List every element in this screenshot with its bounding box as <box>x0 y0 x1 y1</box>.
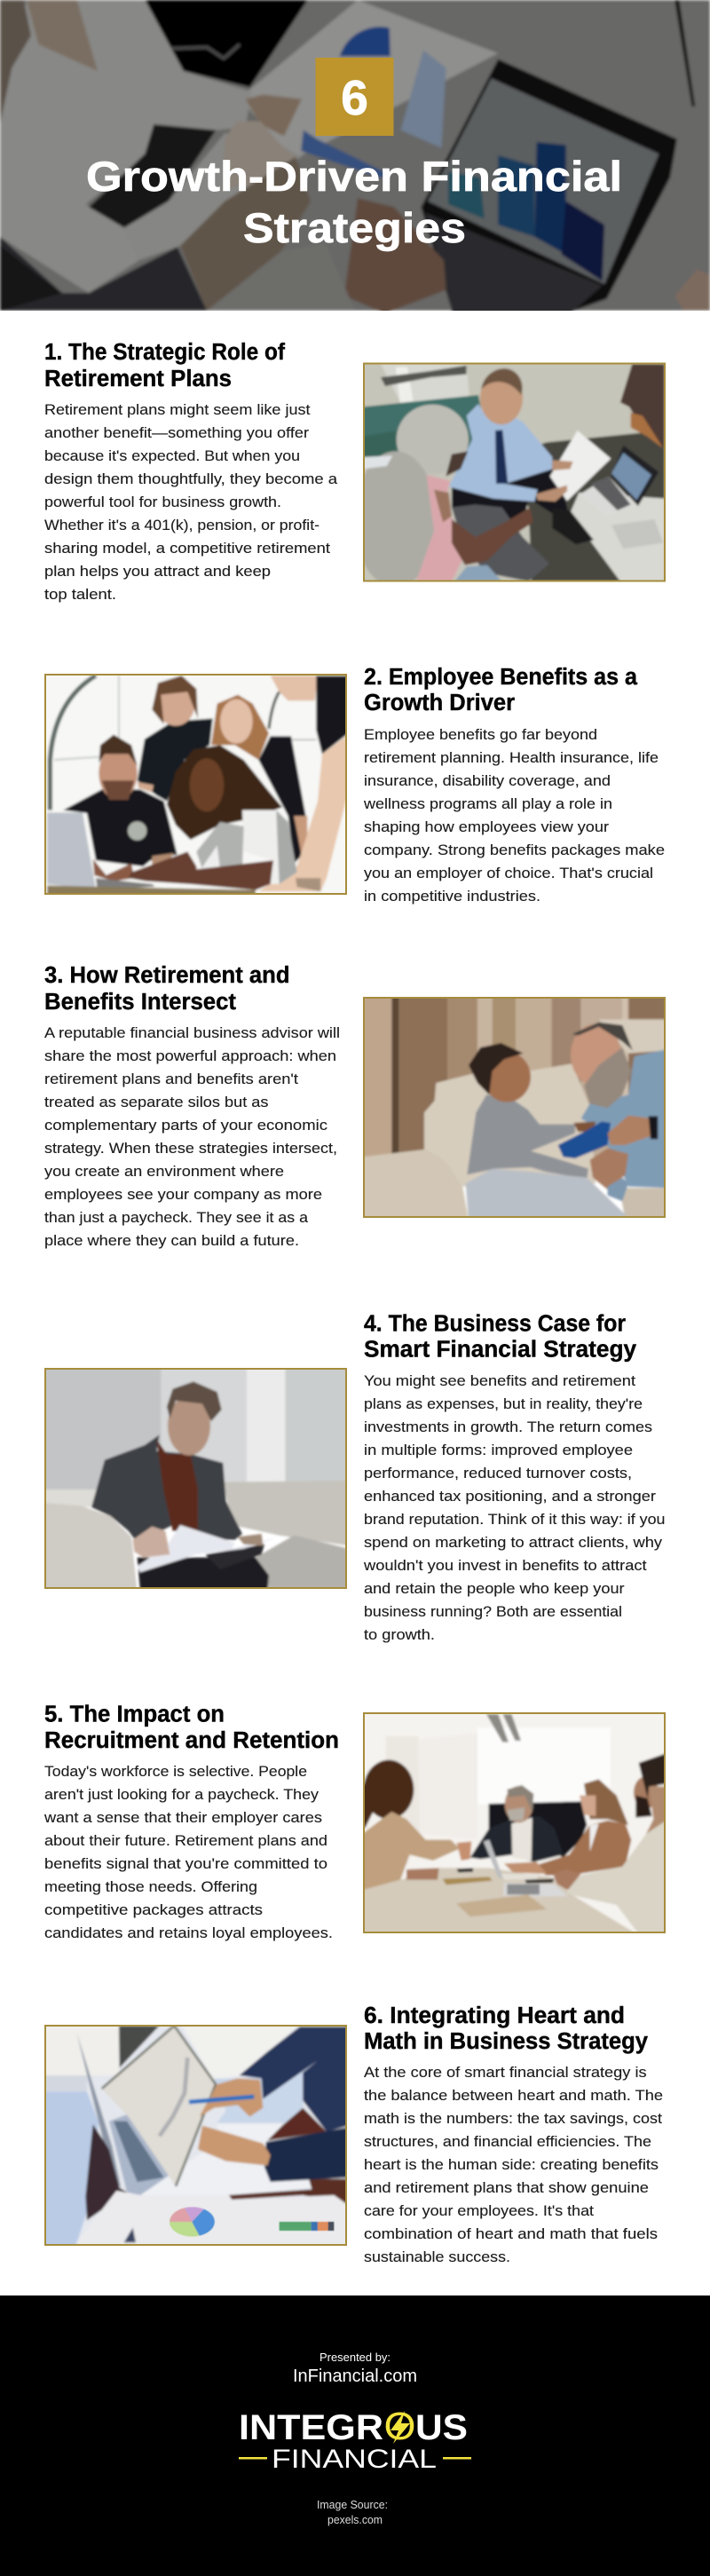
main title: Growth-Driven Financial <box>86 153 622 200</box>
body text 1: top talent. <box>44 587 116 603</box>
body text 5: competitive packages attracts <box>44 1902 263 1918</box>
body text 4: investments in growth. The return comes <box>364 1419 652 1435</box>
presented by: Presented by: <box>320 2351 390 2364</box>
heading 1: Retirement Plans <box>44 367 232 391</box>
body text 5: want a sense that their employer cares <box>43 1810 322 1826</box>
body text 3: employees see your company as more <box>44 1187 322 1203</box>
body text 3: you create an environment where <box>44 1164 284 1180</box>
body text 1: Whether it's a 401(k), pension, or profit- <box>44 518 320 533</box>
image source credit: pexels.com <box>327 2513 383 2526</box>
body text 2: in competitive industries. <box>364 889 540 905</box>
icon: lightning bolt <box>390 2411 410 2444</box>
body text 4: enhanced tax positioning, and a stronger <box>364 1489 657 1505</box>
presented by: InFinancial.com <box>293 2367 417 2386</box>
body text 5: benefits signal that you're committed to <box>44 1856 327 1872</box>
heading 4: Smart Financial Strategy <box>364 1337 637 1362</box>
body text 5: aren't just looking for a paycheck. They <box>44 1787 320 1803</box>
number badge <box>316 58 394 136</box>
hero banner <box>0 0 710 313</box>
photo: man reading papers on sofa <box>43 1365 349 1592</box>
body text 2: you an employer of choice. That's crucial <box>364 865 653 881</box>
section 1: strategic role of retirement plans <box>44 340 669 603</box>
body text 3 <box>44 1025 340 1249</box>
company logo <box>239 2405 471 2474</box>
body text 6: care for your employees. It's that <box>364 2203 594 2219</box>
main title: Strategies <box>243 204 466 251</box>
body text 3: treated as separate silos but as <box>44 1094 268 1110</box>
company logo: FINANCIAL <box>272 2445 437 2474</box>
body text 2: company. Strong benefits packages make <box>364 842 665 858</box>
hero background photo: laptop and charts <box>0 0 710 313</box>
body text 3: place where they can build a future. <box>44 1233 299 1249</box>
body text 4: in multiple forms: improved employee <box>364 1442 633 1458</box>
heading 1: 1. The Strategic Role of <box>44 340 285 365</box>
body text 4: performance, reduced turnover costs, <box>364 1466 632 1482</box>
heading 2 <box>364 665 638 715</box>
body text 4 <box>363 1373 666 1643</box>
body text 3: A reputable financial business advisor will <box>44 1025 340 1041</box>
body text 2: shaping how employees view your <box>364 819 610 835</box>
body text 5: meeting those needs. Offering <box>44 1879 257 1895</box>
heading 2: 2. Employee Benefits as a <box>364 665 638 690</box>
body text 1: because it's expected. But when you <box>44 448 300 464</box>
photo: tablet with financial charts <box>43 2022 349 2248</box>
heading 4 <box>364 1312 637 1362</box>
body text 1: plan helps you attract and keep <box>44 564 271 580</box>
company logo: INTEGR <box>239 2408 383 2447</box>
body text 1: another benefit—something you offer <box>44 425 310 441</box>
photo: team around laptop <box>43 671 349 897</box>
heading 6: 6. Integrating Heart and <box>364 2003 625 2028</box>
heading 5 <box>44 1703 339 1753</box>
body text 4: business running? Both are essential <box>364 1604 622 1620</box>
section 6: heart and math <box>43 2003 663 2265</box>
body text 6: heart is the human side: creating benefits <box>364 2157 659 2173</box>
body text 3: than just a paycheck. They see it as a <box>44 1210 309 1226</box>
body text 4: to growth. <box>364 1627 435 1643</box>
body text 4: and retain the people who keep your <box>364 1581 625 1597</box>
body text 5 <box>43 1764 333 1941</box>
body text 4: wouldn't you invest in benefits to attract <box>363 1558 647 1574</box>
heading 5: 5. The Impact on <box>44 1703 225 1727</box>
image source credit <box>317 2498 388 2526</box>
body text 6: At the core of smart financial strategy is <box>364 2065 647 2081</box>
number badge: 6 <box>341 70 368 125</box>
body text 3: share the most powerful approach: when <box>44 1048 336 1064</box>
body text 1: sharing model, a competitive retirement <box>44 541 330 557</box>
body text 1: Retirement plans might seem like just <box>44 402 311 418</box>
body text 4: You might see benefits and retirement <box>364 1373 635 1389</box>
body text 3: complementary parts of your economic <box>44 1118 327 1134</box>
body text 3: strategy. When these strategies intersect, <box>44 1141 337 1157</box>
company logo: O <box>383 2405 415 2448</box>
heading 5: Recruitment and Retention <box>44 1728 339 1753</box>
heading 4: 4. The Business Case for <box>364 1312 626 1337</box>
body text 5: about their future. Retirement plans and <box>44 1833 327 1849</box>
body text 6: and retirement plans that show genuine <box>364 2180 649 2196</box>
photo: boardroom handshake <box>362 1710 668 1936</box>
body text 3: retirement plans and benefits aren't <box>44 1071 298 1087</box>
body text 2: Employee benefits go far beyond <box>364 727 597 743</box>
body text 6: combination of heart and math that fuels <box>364 2226 658 2242</box>
heading 6 <box>364 2003 649 2054</box>
body text 6: the balance between heart and math. The <box>364 2088 663 2104</box>
heading 6: Math in Business Strategy <box>364 2029 649 2054</box>
company logo: US <box>415 2408 468 2447</box>
heading 2: Growth Driver <box>364 691 515 715</box>
body text 6: math is the numbers: the tax savings, cost <box>364 2111 662 2127</box>
body text 2 <box>363 727 665 905</box>
body text 4: brand reputation. Think of it this way: if you <box>364 1512 666 1528</box>
footer <box>0 2295 710 2576</box>
section 3: retirement and benefits intersect <box>44 963 668 1249</box>
body text 6 <box>364 2065 663 2265</box>
body text 2: wellness programs all play a role in <box>363 796 612 812</box>
body text 5: Today's workforce is selective. People <box>44 1764 307 1780</box>
body text 4: spend on marketing to attract clients, why <box>364 1535 663 1551</box>
body text 5: candidates and retains loyal employees. <box>44 1925 333 1941</box>
heading 3 <box>44 963 289 1015</box>
section 2: employee benefits <box>43 665 665 905</box>
heading 3: Benefits Intersect <box>44 990 236 1015</box>
main title <box>86 153 622 251</box>
presented by <box>293 2351 417 2386</box>
body text 4: plans as expenses, but in reality, they're <box>364 1396 643 1412</box>
heading 3: 3. How Retirement and <box>44 963 289 988</box>
body text 2: retirement planning. Health insurance, life <box>364 750 659 766</box>
photo: grandfather and child on sofa <box>362 994 668 1221</box>
body text 1: design them thoughtfully, they become a <box>44 471 338 487</box>
heading 1 <box>44 340 285 391</box>
body text 6: structures, and financial efficiencies. The <box>364 2134 651 2150</box>
body text 1 <box>44 402 338 603</box>
section 4: business case <box>43 1312 666 1643</box>
body text 6: sustainable success. <box>364 2249 510 2265</box>
image source credit: Image Source: <box>317 2498 388 2511</box>
section 5: recruitment and retention <box>43 1703 668 1941</box>
photo: advisor with older couple <box>354 360 669 588</box>
body text 1: powerful tool for business growth. <box>44 494 281 510</box>
body text 2: insurance, disability coverage, and <box>364 773 611 789</box>
